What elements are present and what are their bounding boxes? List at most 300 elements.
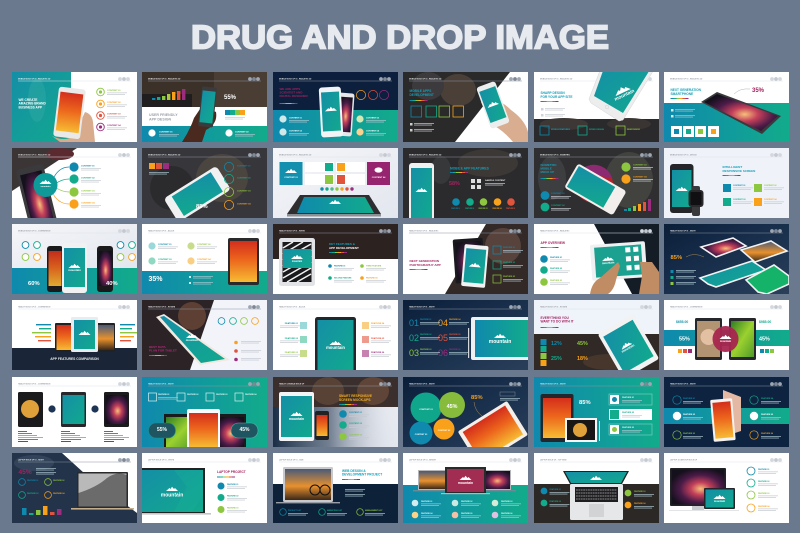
slide 32: laptop project: LAPTOP MOCK UP 01 - WHITE — [148, 459, 175, 462]
slide 25: three tablets with bars — [12, 377, 137, 447]
stat: 85% — [471, 395, 483, 401]
content circles: CONTENT 01 — [289, 118, 303, 120]
features: THIRD FEATURE — [366, 264, 382, 268]
outline tiles — [493, 246, 523, 283]
tablets — [700, 238, 789, 294]
outline tiles: FEATURE 03 — [503, 275, 516, 278]
rings: CONTENT 02 — [237, 178, 251, 180]
stats: 25% — [551, 356, 562, 362]
slide 11: isometric mock up: MOBILE MOCK UP 01 - ISOMETRIC — [540, 155, 571, 157]
side tablets — [55, 323, 115, 352]
tablet — [228, 238, 259, 285]
center circle: mountain — [720, 340, 732, 343]
numbers: 02 — [409, 333, 419, 343]
slide 12: responsive screen and watch: MOBILE MOCK UP 01 - DEVICE — [670, 155, 698, 157]
icon column — [540, 339, 546, 366]
slide 27: smart responsive screen: TABLET & MOBILE MOCK UP — [279, 383, 305, 386]
features: FEATURE 01 — [421, 500, 432, 503]
feature list — [540, 255, 570, 286]
right price: $985.00 — [759, 320, 771, 324]
tiles: CONTENT 03 — [733, 199, 746, 201]
slide 17: app overview: TABLET MOCK UP 01 - REALISTIC — [540, 230, 570, 233]
phone — [670, 164, 694, 213]
feature tiles — [540, 126, 641, 135]
heading: NEXT GENERATION — [410, 259, 440, 263]
side bullets: CONTENT 02 — [551, 205, 565, 207]
heading: PHOTOGRAPHY APP — [410, 263, 441, 267]
features — [328, 264, 386, 282]
white diagonal — [455, 72, 528, 142]
list — [339, 410, 369, 440]
features: FEATURE 04 — [421, 512, 433, 515]
left pill: 55% — [157, 427, 168, 433]
white tablet — [461, 244, 489, 288]
laptop lid — [563, 471, 629, 484]
controls: SAMPLE CONTENT — [485, 179, 506, 182]
features: FEATURE 02 — [758, 480, 769, 483]
side bullets — [541, 162, 653, 211]
feature list — [97, 88, 127, 131]
circle orange: CONTENT 02 — [438, 430, 451, 432]
features: FEATURE 03 — [27, 492, 38, 495]
text tile — [500, 392, 520, 400]
left features — [541, 488, 570, 506]
tablet: mountain — [326, 345, 345, 350]
tablet — [710, 398, 736, 442]
logo: mountain — [621, 343, 635, 354]
features: FEATURE 06 — [501, 512, 512, 515]
features: FEATURE 03 — [758, 492, 769, 495]
features — [412, 500, 521, 518]
labels: FEATURE 06 — [449, 348, 460, 351]
slide 6: next generation smartphone — [664, 72, 789, 142]
center tablet — [71, 317, 98, 352]
stats: 18% — [577, 356, 588, 362]
feature circles: FEATURE 01 — [451, 207, 460, 210]
phone — [476, 81, 510, 129]
slide 24: price comparison — [664, 300, 789, 370]
features: FEATURE 04 — [53, 492, 65, 495]
slide 36: monitor and laptop: LAPTOP & DESKTOP MOCK UP — [670, 459, 698, 462]
left tile: CONTENT 01 — [284, 177, 299, 179]
bar chart — [152, 89, 185, 100]
heading: RESPONSIVE SCREEN — [722, 169, 755, 173]
heading: DEVELOPMENT PROJECT — [342, 473, 382, 477]
left tablet — [695, 318, 722, 360]
phone — [53, 86, 86, 139]
arrow — [686, 254, 704, 257]
tiles: CONTENT 04 — [764, 198, 777, 201]
tablet — [598, 314, 659, 379]
slide 11: isometric mock up — [534, 148, 659, 218]
list — [189, 276, 213, 284]
heading: EVERYTHING YOU — [540, 316, 570, 320]
left features — [280, 322, 307, 357]
numbers: 01 — [409, 318, 419, 328]
feature grid: CONTENT 03 — [158, 259, 172, 261]
dots — [320, 187, 354, 191]
heading: MOBILE APPS — [410, 89, 431, 93]
feature grid: CONTENT 01 — [158, 244, 172, 246]
mountain logo: mountain — [614, 88, 636, 103]
features — [19, 479, 65, 498]
hand — [52, 112, 95, 142]
separators — [48, 405, 99, 413]
slide 13: phone comparison — [12, 224, 137, 294]
hands — [590, 262, 659, 294]
right features: FEATURE 06 — [371, 351, 385, 354]
slide 8: tilted phone on dark: MOBILE MOCK UP 01 - REALISTIC 3D — [148, 154, 181, 157]
outline tiles — [148, 393, 243, 401]
tiles: CONTENT 02 — [764, 185, 777, 187]
right features: FEATURE 06 — [761, 432, 774, 435]
stats: 45% — [577, 341, 588, 347]
slide 2: user friendly app design — [142, 72, 267, 142]
features: FEATURE 01 — [227, 483, 238, 486]
nodes: CONTENT 01 — [81, 166, 95, 168]
slide 34: three laptops: LAPTOP MOCK UP 01 - BRIGHT — [409, 459, 437, 462]
card 2: FEATURE 02 — [622, 411, 635, 414]
slide 8: tilted phone on dark — [142, 148, 267, 218]
left shade — [273, 407, 398, 447]
slide 28: bubbles and tablet — [403, 377, 528, 447]
right features — [362, 322, 391, 357]
slide 31: laptop on navy: LAPTOP MOCK UP 01 - NIGHT — [18, 459, 45, 462]
content circles — [279, 115, 386, 136]
heading: ISOMETRIC — [540, 163, 557, 167]
slide 10: mobile app features: MOBILE MOCK UP 01 - REALISTIC 3D — [409, 154, 442, 157]
footer features: MANAGEMENT LIST — [365, 509, 383, 512]
feature grid — [148, 242, 217, 265]
slide 20: best data plan for tablet: TABLET MOCK UP 01 - ROTATE — [148, 306, 176, 309]
heading: NEXT GENERATION — [670, 88, 702, 92]
list — [541, 108, 565, 116]
monitor — [669, 468, 739, 511]
tiles — [671, 126, 719, 137]
labels: FEATURE 03 — [420, 348, 431, 351]
labels: FEATURE 04 — [449, 318, 461, 321]
footer features: MARKETING LIST — [327, 509, 343, 512]
slide 33: web design project — [273, 453, 398, 523]
features: FEATURE 04 — [758, 505, 770, 508]
top rings — [218, 318, 258, 324]
heading: SCREEN MOCK-UPS — [339, 398, 371, 402]
feature circles: FEATURE 03 — [478, 207, 488, 210]
slide 10: mobile app features — [403, 148, 528, 218]
slide 14: tablet with contents: TABLET MOCK UP 01 - BLACK — [148, 230, 175, 233]
slide 13: phone comparison: MOBILE MOCK UP 01 - COMPARISON — [18, 230, 51, 233]
bar chart — [624, 199, 651, 211]
bar groups — [18, 431, 129, 442]
stats — [551, 341, 588, 362]
right tiles — [760, 349, 774, 353]
icon tiles — [225, 110, 245, 119]
slide 1: we create amazing brand: MOBILE MOCK UP 01 - REALISTIC 3D — [18, 78, 51, 81]
features — [747, 467, 778, 512]
slide 24: price comparison: TABLET MOCK UP 01 - COMPARISON — [670, 306, 703, 309]
heading: PLAN FOR TABLET — [149, 348, 177, 352]
list — [670, 270, 696, 285]
heading: APP DEVELOPMENT — [329, 246, 359, 250]
center laptop: mountain — [458, 481, 473, 485]
right tile: CONTENT 04 — [372, 176, 386, 179]
content circles: CONTENT 04 — [366, 130, 380, 133]
stat: 45% — [18, 469, 32, 476]
slide 21: tablet with logo — [273, 300, 398, 370]
stats: 12% — [551, 341, 562, 347]
laptop — [276, 467, 340, 503]
heading: MOBILE APP FEATURES — [450, 166, 490, 170]
arrow — [474, 402, 482, 416]
heading: AMAZING BRAND — [18, 102, 46, 106]
landscape phone — [287, 195, 381, 216]
heading: SHARP DESIGN — [540, 91, 565, 95]
phone — [589, 68, 655, 121]
right features: FEATURE 03 — [634, 490, 645, 493]
slide 19: app features comparison: TABLET MOCK UP 01 - COMPARISON — [18, 306, 51, 309]
rings: CONTENT 01 — [237, 166, 251, 168]
list: CONTENT 01 — [349, 412, 363, 414]
rose tablet — [723, 390, 741, 437]
features: FEATURE 01 — [27, 479, 38, 482]
hand — [481, 99, 528, 142]
tablets — [18, 392, 129, 427]
heading: LAPTOP PROJECT — [217, 470, 246, 474]
features: SECOND FEATURE — [334, 276, 352, 280]
slide 26: teal device comparison — [142, 377, 267, 447]
slide 33: web design project: LAPTOP MOCK UP 01 - SIDE — [279, 459, 304, 462]
feature circles — [451, 198, 515, 210]
slide 28: bubbles and tablet: TABLET MOCK UP 01 - NIGHT — [409, 383, 435, 386]
slide 34: three laptops — [403, 453, 528, 523]
slide 29: teal tablets and cards: TABLET MOCK UP 01 - NIGHT — [540, 383, 566, 386]
heading: WE ARE APPS — [280, 87, 300, 91]
stats: 55% — [679, 336, 690, 342]
feature list: CONTENT 01 — [107, 90, 121, 92]
tablet — [458, 401, 528, 465]
slide 9: tiles and landscape phone — [273, 148, 398, 218]
tablet: mountain — [292, 260, 303, 263]
outline tiles: FEATURE 02 — [503, 261, 516, 264]
labels: FEATURE 05 — [449, 333, 460, 336]
footer features — [280, 509, 385, 515]
labels: FEATURE 03 — [216, 393, 227, 396]
feature list: CONTENT 02 — [107, 102, 121, 104]
feature grid: CONTENT 02 — [197, 244, 211, 246]
slide 27: smart responsive screen — [273, 377, 398, 447]
list: CONTENT 03 — [349, 434, 363, 436]
feature list: FEATURE 01 — [550, 256, 563, 259]
stat: 85% — [579, 400, 591, 406]
slide 15: key features — [273, 224, 398, 294]
tablet: mountain — [602, 260, 615, 265]
slide 36: monitor and laptop — [664, 453, 789, 523]
heading: DIGITAL DESIGNER — [280, 94, 309, 98]
center tablet — [187, 409, 220, 449]
tablet — [156, 314, 230, 365]
phone — [701, 92, 781, 134]
feature tiles: RESPONSIVE — [627, 129, 641, 131]
features — [218, 482, 247, 513]
footer content: CONTENT 02 — [235, 132, 249, 134]
heading: FOR YOUR APP SITE — [540, 95, 572, 99]
slide 25: three tablets with bars: TABLET MOCK UP 01 - COMPARISON — [18, 383, 51, 386]
slide 21: tablet with logo: TABLET MOCK UP 01 - BLACK — [279, 306, 306, 309]
left tiles — [678, 349, 692, 353]
left features: FEATURE 02 — [285, 337, 299, 340]
list — [671, 109, 695, 118]
labels: FEATURE 01 — [420, 318, 431, 321]
rings: CONTENT 04 — [237, 202, 251, 206]
labels — [158, 393, 257, 399]
labels: FEATURE 02 — [187, 393, 198, 396]
left features: FEATURE 01 — [683, 397, 696, 400]
heading: SCIENTIST AND — [280, 90, 303, 94]
numbers — [409, 318, 448, 358]
card 1: FEATURE 01 — [622, 396, 635, 399]
right pill: 45% — [239, 427, 250, 433]
outline tiles — [411, 106, 464, 117]
slide 20: best data plan for tablet — [142, 300, 267, 370]
slide 18: four isometric tablets: TABLET MOCK UP 01 - NIGHT — [670, 230, 696, 233]
left features: FEATURE 02 — [683, 413, 696, 416]
footer content — [148, 129, 255, 137]
phone — [198, 86, 217, 128]
text — [36, 468, 56, 474]
right tablet — [729, 318, 756, 360]
circle green: 45% — [447, 404, 458, 410]
bar chart — [22, 506, 62, 515]
heading: DEVELOPMENT — [410, 93, 434, 97]
arrow — [734, 89, 750, 94]
stat: 35% — [752, 88, 765, 94]
hand — [182, 106, 216, 142]
slide 23: everything you want: TABLET MOCK UP 01 - ROTATE — [540, 306, 568, 309]
features: FEATURE 03 — [501, 500, 512, 503]
slide 18: four isometric tablets — [664, 224, 789, 294]
slide 30: rose gold tablets — [664, 377, 789, 447]
numbers: 04 — [438, 318, 448, 328]
stylus — [468, 328, 469, 358]
stats: 40% — [106, 281, 118, 287]
features: FEATURE 02 — [461, 500, 472, 503]
connectors — [52, 167, 69, 204]
laptop base — [570, 484, 623, 520]
heading: INTELLIGENT — [722, 165, 742, 169]
icon rings — [356, 90, 389, 100]
stat: 85% — [670, 255, 682, 261]
heading: WEB DESIGN & — [342, 469, 366, 473]
stat: 55% — [224, 95, 237, 101]
stats: 45% — [759, 336, 770, 342]
left features: FEATURE 03 — [285, 351, 299, 354]
numbers: 05 — [438, 333, 448, 343]
slide 7: mind map — [12, 148, 137, 218]
left features: FEATURE 01 — [550, 488, 561, 491]
heading: SMARTPHONE — [670, 92, 693, 96]
features: FEATURE 04 — [366, 276, 378, 280]
side phones — [47, 246, 113, 292]
list: CONTENT 02 — [349, 423, 363, 425]
text list — [345, 489, 365, 496]
left features — [673, 396, 703, 439]
heading: WE CREATE — [18, 98, 37, 102]
phones — [319, 86, 355, 138]
feature tiles: MOBILE FEATURES — [551, 128, 571, 131]
phone — [564, 163, 627, 215]
content circles: CONTENT 03 — [366, 118, 380, 120]
purple arc — [579, 165, 612, 178]
stat: 35% — [148, 276, 163, 283]
middle tiles — [305, 162, 365, 185]
heading: MOBILE — [540, 166, 552, 170]
side bullets: CONTENT 01 — [551, 193, 565, 195]
left features: FEATURE 03 — [683, 432, 696, 435]
central circle: mountain — [41, 185, 51, 188]
left tablet — [164, 414, 196, 447]
outline tiles: FEATURE 01 — [503, 246, 516, 249]
feature tiles: SPEED DESIGN — [589, 129, 605, 131]
slide 4: mobile apps development: MOBILE MOCK UP 01 - REALISTIC 3D — [409, 78, 442, 81]
slide 35: laptop top view: LAPTOP MOCK UP - TOP VIEW — [540, 459, 567, 462]
slide 3: we are apps scientist: MOBILE MOCK UP 01 - REALISTIC 3D — [279, 78, 312, 81]
logo: mountain — [186, 338, 199, 342]
phone — [409, 163, 434, 221]
feature grid: CONTENT 04 — [197, 258, 211, 261]
laptop: mountain — [714, 500, 726, 503]
features: FEATURE 02 — [227, 494, 238, 498]
slide 32: laptop project — [142, 453, 267, 523]
right features: FEATURE 05 — [371, 337, 385, 340]
slide 16: next generation photography: TABLET MOCK UP 01 - REALISTIC — [409, 230, 439, 233]
feature circles: FEATURE 02 — [465, 207, 474, 210]
tablet — [540, 394, 574, 442]
right bars — [120, 324, 137, 341]
stat: 58% — [449, 181, 460, 187]
phone — [315, 411, 329, 440]
slide 4: mobile apps development — [403, 72, 528, 142]
footer features: PRODUCT LIST — [288, 510, 302, 512]
slide 22: numbered features — [403, 300, 528, 370]
stylus — [598, 421, 601, 441]
right features — [625, 490, 654, 508]
slide 5: sharp design: MOBILE MOCK UP 01 - REALISTIC 3D — [540, 78, 573, 81]
slide 2: user friendly app design: MOBILE MOCK UP 01 - REALISTIC 3D — [148, 78, 181, 81]
slide 9: tiles and landscape phone: MOBILE MOCK UP 01 - REALISTIC 3D — [279, 154, 312, 157]
slide 35: laptop top view — [534, 453, 659, 523]
icon tiles — [149, 163, 169, 174]
right features: FEATURE 05 — [761, 413, 774, 416]
card 3: FEATURE 03 — [622, 426, 635, 429]
labels: FEATURE 02 — [420, 333, 431, 336]
small tablet — [565, 418, 597, 442]
slide 7: mind map: MOBILE MOCK UP 01 - REALISTIC 3D — [18, 154, 51, 157]
heading: APP OVERVIEW — [540, 241, 565, 245]
feature list: FEATURE 02 — [550, 267, 563, 270]
slide 16: next generation photography — [403, 224, 528, 294]
heading: WANT TO DO WITH IT — [540, 320, 574, 324]
left bars — [32, 324, 51, 341]
heading: APP FEATURES COMPARISON — [50, 357, 99, 361]
slide 19: app features comparison — [12, 300, 137, 370]
slide 1: we create amazing brand — [12, 72, 137, 142]
rings: CONTENT 03 — [237, 190, 251, 192]
bullet list — [234, 341, 261, 361]
features: FEATURE 01 — [758, 468, 769, 471]
slide 23: everything you want — [534, 300, 659, 370]
tablet: mountain — [289, 417, 304, 421]
slide 22: numbered features: TABLET MOCK UP 01 - NIGHT — [409, 306, 435, 309]
